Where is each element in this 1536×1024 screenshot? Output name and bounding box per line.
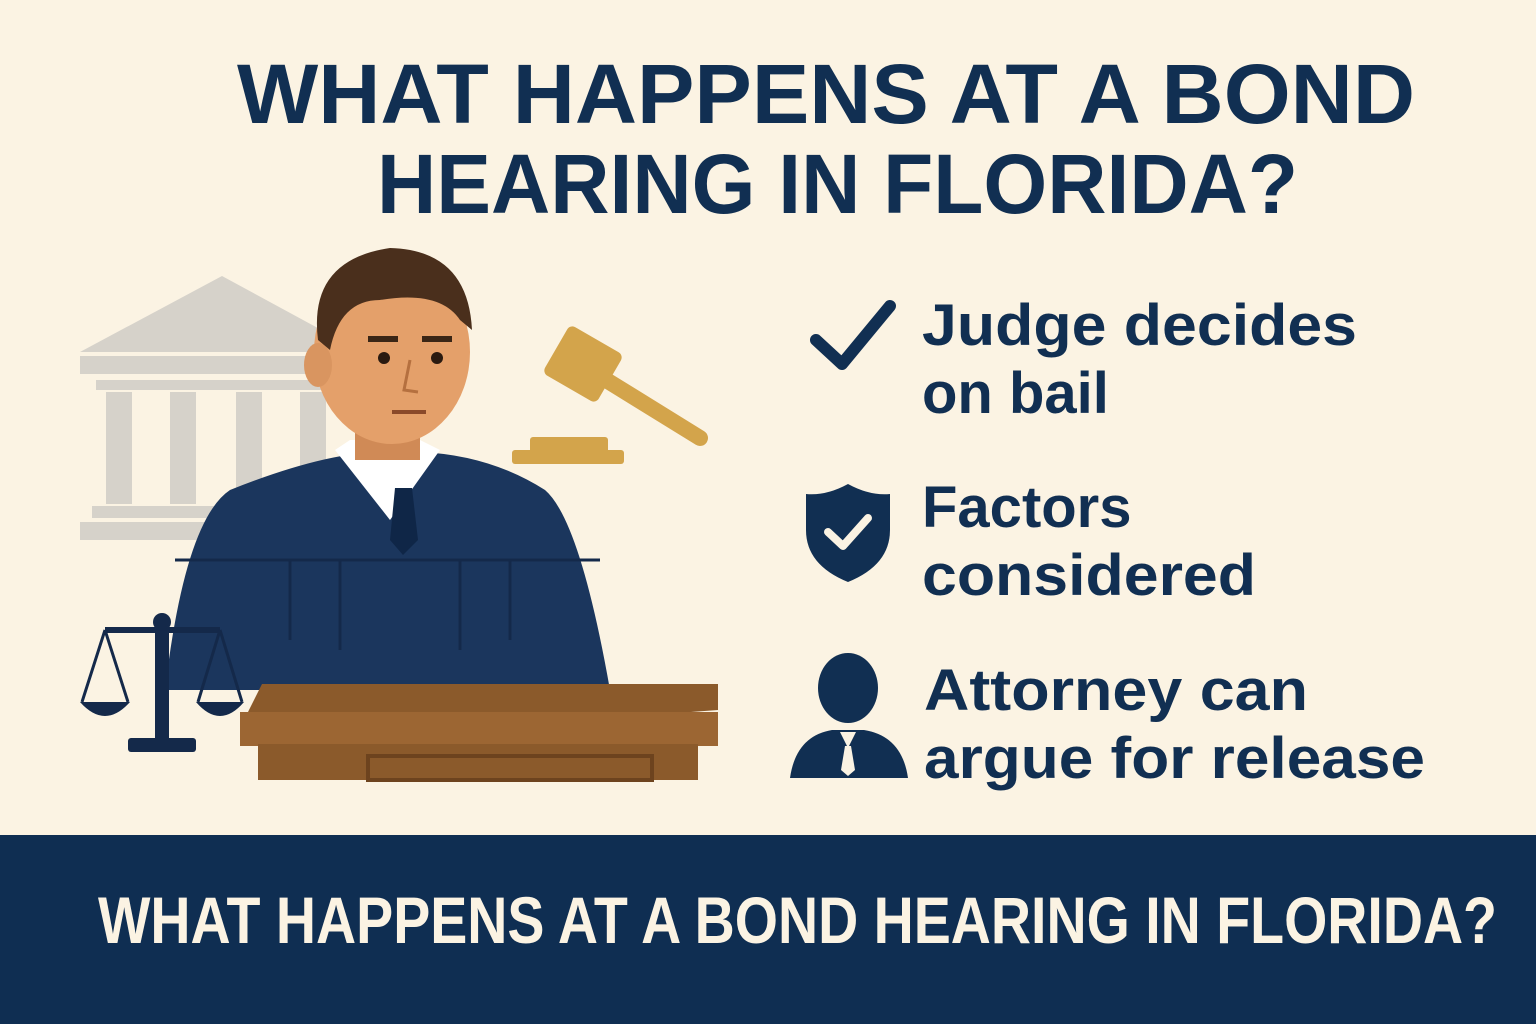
bullet 1 text: on bail	[922, 361, 1109, 426]
bullet 1 text	[922, 293, 1357, 426]
neck	[355, 400, 420, 460]
bullet 2 text: Factors	[922, 475, 1132, 540]
judge figure	[165, 248, 610, 690]
podium	[240, 684, 718, 780]
bullet 1 text: Judge decides	[922, 293, 1357, 358]
head	[314, 260, 470, 444]
bullet 3: attorney icon	[790, 653, 908, 778]
bullet 2: shield icon	[806, 484, 890, 582]
hair	[317, 248, 472, 350]
bullet 3 text: argue for release	[924, 726, 1425, 791]
title: HEARING IN FLORIDA?	[377, 137, 1298, 231]
bullet 3 text	[924, 658, 1425, 791]
title: WHAT HAPPENS AT A BOND	[237, 47, 1415, 141]
collar and tie	[335, 440, 440, 520]
icon: scales	[80, 613, 244, 752]
title	[237, 47, 1415, 231]
bullet 2 text	[922, 475, 1256, 608]
robe	[165, 452, 610, 690]
icon: gavel	[512, 324, 700, 464]
footer banner	[0, 835, 1536, 1024]
icon: courthouse	[80, 276, 362, 540]
bullet 1: checkmark	[816, 306, 890, 364]
bullet 3 text: Attorney can	[924, 658, 1308, 723]
face	[368, 336, 398, 342]
bullet 2 text: considered	[922, 543, 1256, 608]
